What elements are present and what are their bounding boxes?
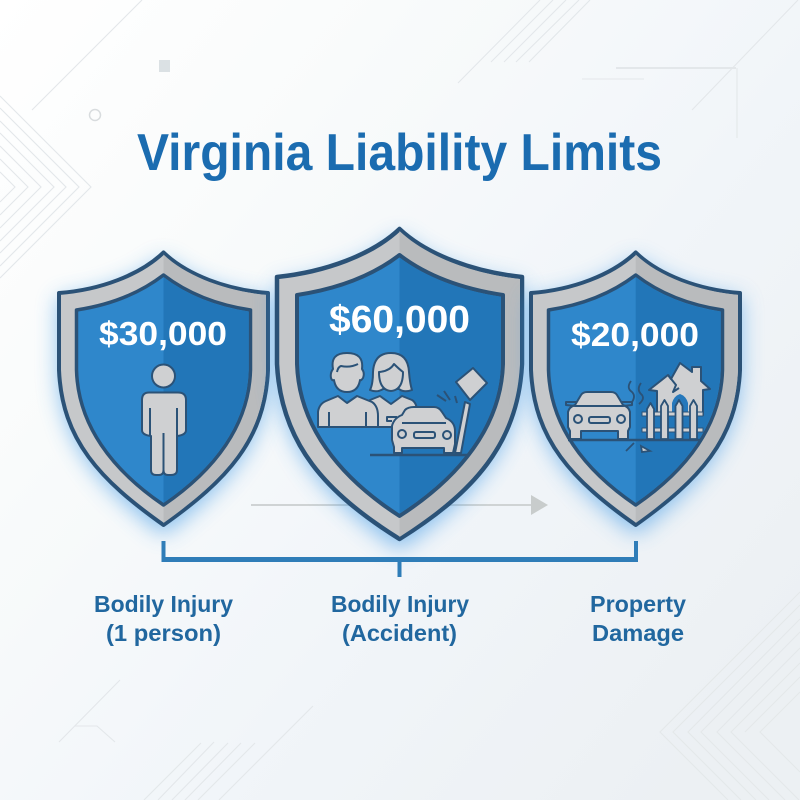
icon: single person (142, 364, 186, 475)
label: Bodily Injury (1 person): Bodily Injury (94, 591, 233, 617)
label: Property Damage: Property (590, 591, 686, 617)
icon: damaged house (649, 363, 710, 415)
label: Bodily Injury (1 person): (1 person) (106, 620, 221, 646)
shield amount: $20,000: $20,000 (571, 316, 699, 353)
icon: fence (568, 400, 703, 440)
shield amount: $30,000: $30,000 (99, 315, 227, 352)
label: Bodily Injury (Accident): (Accident) (342, 620, 457, 646)
icon: smoke and debris (626, 381, 650, 452)
label: Property Damage: Damage (592, 620, 684, 646)
bracket connector (162, 541, 638, 577)
arrow: gray progression arrow behind shields (251, 495, 548, 515)
icon: damaged car (566, 392, 632, 439)
shield amount: $60,000: $60,000 (329, 299, 470, 341)
icon: car hitting sign (370, 368, 487, 455)
label: Bodily Injury (1 person) (94, 591, 233, 646)
title: Virginia Liability Limits (137, 124, 662, 182)
panel: shield $20,000 (530, 252, 741, 535)
icon: man (318, 353, 378, 427)
label: Bodily Injury (Accident) (331, 591, 469, 646)
label: Bodily Injury (Accident): Bodily Injury (331, 591, 469, 617)
panel: shield $30,000 (58, 252, 269, 535)
label: Property Damage (590, 591, 686, 646)
icon: woman (370, 353, 417, 427)
panel: shield $60,000 (276, 229, 523, 550)
